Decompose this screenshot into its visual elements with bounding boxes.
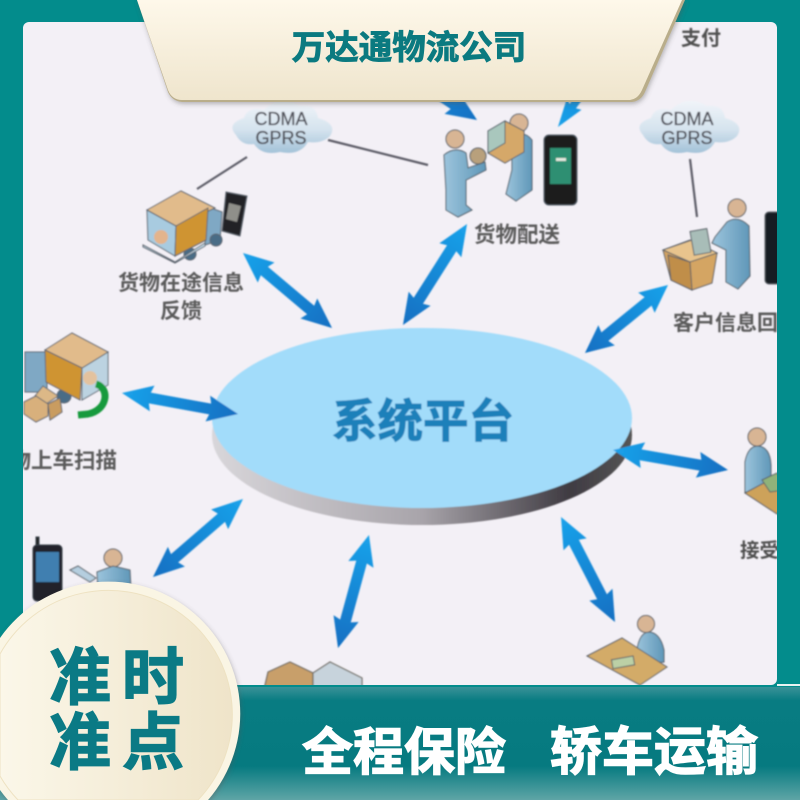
white rule at right <box>777 684 800 686</box>
arrow: platform to handheld <box>152 498 244 578</box>
arrow: loading scan to platform <box>122 384 238 422</box>
label: payment: 支付 <box>681 27 721 50</box>
arrow: platform to warehouse <box>332 534 374 648</box>
header tab <box>137 0 685 102</box>
icon: truck with boxes and green arrow <box>24 333 108 422</box>
panel background <box>23 22 777 685</box>
footer text: full insurance: 全程保险 <box>302 724 506 781</box>
arrow: in-transit to platform <box>242 252 333 329</box>
arrow: delivery to platform <box>402 223 468 326</box>
badge circle <box>0 582 240 800</box>
connector lines <box>197 140 697 217</box>
icon: two delivery workers and phone <box>444 114 577 217</box>
label: loading scan: 物上车扫描 <box>9 449 117 473</box>
system platform disc <box>212 328 632 525</box>
arrow: customer feedback to platform <box>584 284 669 354</box>
label: receive: 接受 <box>740 539 779 562</box>
badge text: on time: 准时 <box>49 644 195 713</box>
arrow: platform to order intake <box>613 442 728 478</box>
arrow: top right behind header <box>557 102 582 128</box>
arrow: platform to desk <box>560 516 616 622</box>
label: customer info return: 客户信息回 <box>673 311 778 335</box>
cloud: CDMA GPRS left: CDMA <box>254 109 308 129</box>
label: in-transit info feedback: 货物在途信息 <box>118 271 244 295</box>
icon: person receiving order <box>745 428 790 514</box>
icon: person at desk <box>587 616 667 685</box>
cloud: CDMA GPRS left <box>232 101 332 153</box>
icon: truck with handheld <box>143 191 247 263</box>
cloud: CDMA GPRS right <box>639 101 739 153</box>
icon: green return arrow <box>78 384 105 415</box>
arrow: top left behind header <box>438 102 478 121</box>
footer text: sedan transport: 轿车运输 <box>550 724 758 782</box>
cloud: CDMA GPRS left: GPRS <box>255 128 307 148</box>
icon: person with scanner <box>70 549 131 590</box>
icon: handheld scanner <box>33 537 62 601</box>
icon: warehouse boxes <box>265 662 362 690</box>
cloud: CDMA GPRS right: GPRS <box>661 128 713 148</box>
label: feedback: 反馈 <box>160 300 202 323</box>
icon: customer with open box and phone <box>663 199 785 290</box>
cloud: CDMA GPRS right: CDMA <box>660 109 714 129</box>
platform label: 系统平台 <box>332 396 514 447</box>
title: 万达通物流公司 <box>292 30 526 67</box>
badge text: punctual: 准点 <box>49 709 195 778</box>
footer band <box>0 687 800 800</box>
label: goods delivery: 货物配送 <box>474 223 560 247</box>
